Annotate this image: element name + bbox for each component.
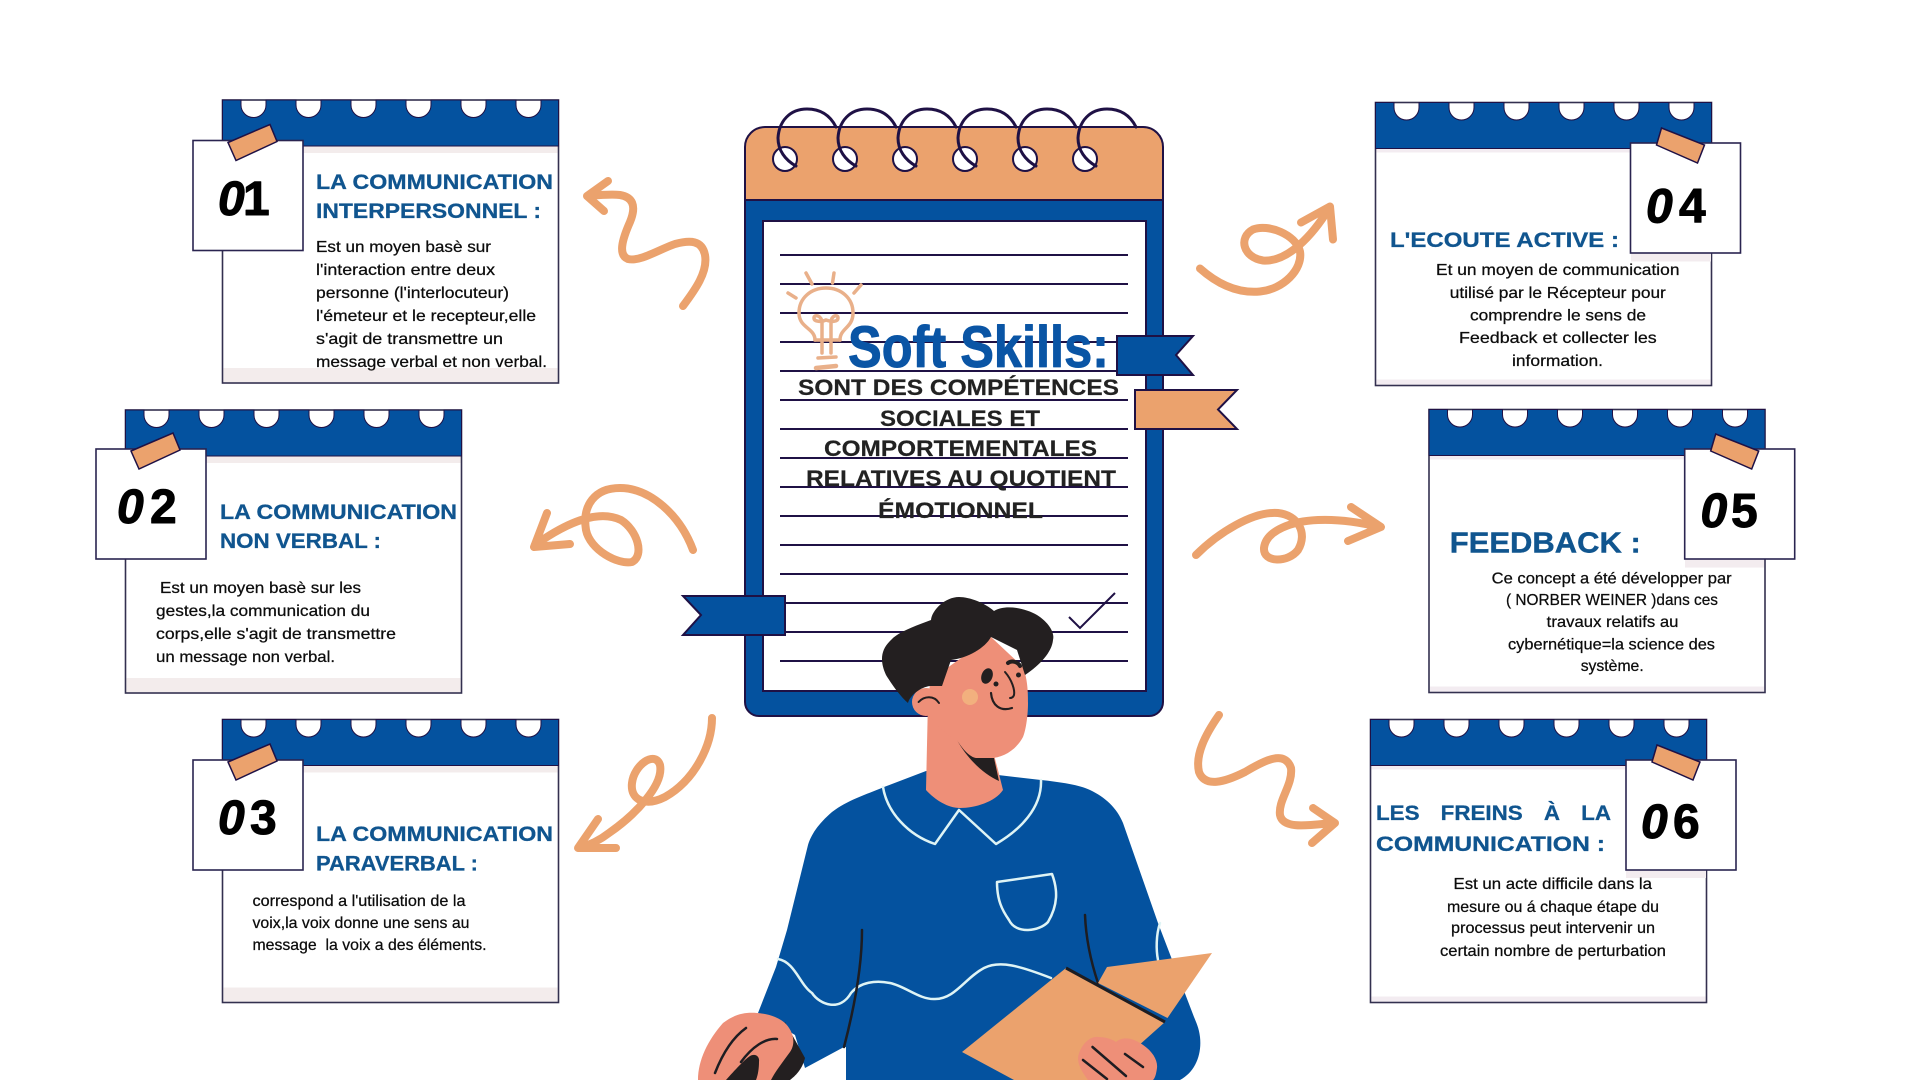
pocket [997, 874, 1056, 930]
heading 02: NON VERBAL : [220, 530, 381, 553]
arrow: to card 02 [534, 488, 693, 562]
body text 06: mesure ou á chaque étape du [1447, 899, 1659, 916]
cuff [760, 1022, 805, 1080]
folder front page [962, 968, 1165, 1080]
face [928, 637, 1028, 758]
right hand fingers [1083, 1047, 1143, 1079]
body text 02: un message non verbal. [156, 649, 335, 666]
body text 04 [1436, 262, 1680, 370]
body text 01: personne (l'interlocuteur) [316, 285, 509, 302]
subtitle text block: ÉMOTIONNEL [878, 498, 1043, 523]
heading 06: COMMUNICATION : [1376, 833, 1605, 856]
notebook paper [763, 221, 1146, 691]
sleeve line [1157, 923, 1160, 960]
body text 01: message verbal et non verbal. [316, 354, 547, 371]
number 05: 5 [1731, 485, 1758, 538]
body text 02 [156, 580, 396, 666]
arrow: to card 06 [1198, 715, 1335, 843]
body text 05: ( NORBER WEINER )dans ces [1506, 592, 1718, 609]
body text 04: Et un moyen de communication [1436, 262, 1680, 279]
notebook holes [773, 147, 1097, 171]
heading 01: LA COMMUNICATION [316, 171, 553, 194]
heading 06 [1376, 802, 1611, 856]
number 06: 6 [1673, 796, 1700, 849]
heading 02 [220, 501, 457, 553]
panel: card 01 [193, 100, 558, 383]
number 01: 0 [218, 173, 245, 226]
arrow: to card 05 [1196, 507, 1381, 560]
body text 01: s'agit de transmettre un [316, 331, 503, 348]
neck [926, 700, 1003, 808]
chin shadow [957, 740, 999, 781]
face features [919, 662, 1021, 709]
heading 02: LA COMMUNICATION [220, 501, 457, 524]
body text 05: Ce concept a été développer par [1492, 570, 1732, 588]
body text 02: corps,elle s'agit de transmettre [156, 626, 396, 643]
body text 01: Est un moyen basè sur [316, 239, 492, 256]
subtitle text block: RELATIVES AU QUOTIENT [806, 466, 1117, 491]
subtitle text block: SONT DES COMPÉTENCES [798, 375, 1119, 400]
folder back page [1098, 953, 1212, 1018]
body text 01 [316, 239, 547, 371]
check mark [1069, 593, 1115, 628]
body text 01: l'interaction entre deux [316, 262, 495, 279]
left hand fingers [715, 1028, 777, 1073]
subtitle text block: SOCIALES ET [880, 406, 1041, 431]
right hand [1078, 1037, 1157, 1080]
arrow: to card 04 [1200, 206, 1333, 292]
left hand [698, 1013, 793, 1080]
number 03 [218, 792, 277, 845]
ribbon: orange [1135, 390, 1237, 429]
number 05 [1700, 485, 1758, 538]
heading 04: L'ECOUTE ACTIVE : [1390, 229, 1619, 252]
icon: light bulb [788, 273, 861, 368]
folder spine [1066, 968, 1165, 1022]
heading 06: LES FREINS À LA [1376, 802, 1611, 825]
heading 03: LA COMMUNICATION [316, 823, 553, 846]
body text 06: Est un acte difficile dans la [1454, 876, 1652, 893]
illustration: person [698, 597, 1212, 1080]
notebook spiral rings [778, 109, 1136, 166]
number 02: 2 [150, 481, 177, 534]
ribbon: left blue [683, 596, 785, 635]
number 03: 0 [218, 792, 245, 845]
body text 06: certain nombre de perturbation [1440, 943, 1666, 960]
panel: card 04 [1376, 102, 1740, 386]
heading 05: FEEDBACK : [1450, 528, 1641, 560]
ribbon: top blue [1117, 336, 1193, 375]
number 05: 0 [1700, 485, 1728, 538]
number 04: 4 [1679, 180, 1706, 234]
body text 06 [1440, 876, 1666, 960]
notebook orange header [745, 127, 1163, 200]
body text 04: utilisé par le Récepteur pour [1450, 285, 1667, 302]
panel: card 02 [96, 410, 462, 693]
arrow: to card 01 [587, 181, 705, 306]
number 02: 0 [117, 481, 144, 534]
body text 04: information. [1512, 353, 1603, 370]
panel: card 06 [1370, 720, 1736, 1002]
panel: central notebook [745, 109, 1163, 716]
heading 01 [316, 171, 553, 223]
body text 02: Est un moyen basè sur les [160, 580, 361, 597]
body text 02: gestes,la communication du [156, 603, 370, 620]
subtitle text block [798, 375, 1119, 523]
heading 03 [316, 823, 553, 876]
body text 03 [252, 893, 486, 954]
panel: card 05 [1429, 410, 1795, 692]
collar [883, 780, 1041, 844]
number 03: 3 [250, 792, 277, 845]
subtitle text block: COMPORTEMENTALES [824, 436, 1097, 461]
mouse [726, 1055, 759, 1080]
heading 01: INTERPERSONNEL : [316, 200, 541, 223]
body text 05: travaux relatifs au [1547, 614, 1678, 631]
body text 03: message la voix a des éléments. [252, 937, 486, 954]
sweater folds [844, 930, 862, 1047]
arrow: to card 03 [578, 718, 712, 848]
sweater wave line [778, 959, 1051, 1005]
number 06: 0 [1641, 796, 1668, 849]
body text 03: correspond a l'utilisation de la [252, 893, 466, 910]
ear [912, 688, 940, 716]
notebook ruled lines [780, 255, 1128, 661]
number 04: 0 [1646, 180, 1673, 234]
number 06 [1641, 796, 1700, 849]
panel: card 03 [193, 720, 558, 1002]
body text 05 [1492, 570, 1732, 675]
number 04 [1646, 180, 1706, 234]
body text 05: système. [1581, 658, 1644, 675]
body text 04: Feedback et collecter les [1459, 330, 1657, 347]
body text 04: comprendre le sens de [1470, 308, 1646, 324]
notebook body [745, 200, 1163, 716]
body text 03: voix,la voix donne une sens au [252, 915, 470, 932]
sweater [758, 771, 1200, 1080]
number 02 [117, 481, 177, 534]
body text 06: processus peut intervenir un [1451, 920, 1655, 937]
number 01: 1 [243, 173, 270, 226]
title: Soft Skills: [848, 315, 1109, 380]
body text 01: l'émeteur et le recepteur,elle [316, 308, 536, 325]
body text 05: cybernétique=la science des [1508, 636, 1715, 654]
number 01 [218, 173, 270, 226]
hair [882, 597, 1053, 703]
heading 03: PARAVERBAL : [316, 852, 478, 876]
